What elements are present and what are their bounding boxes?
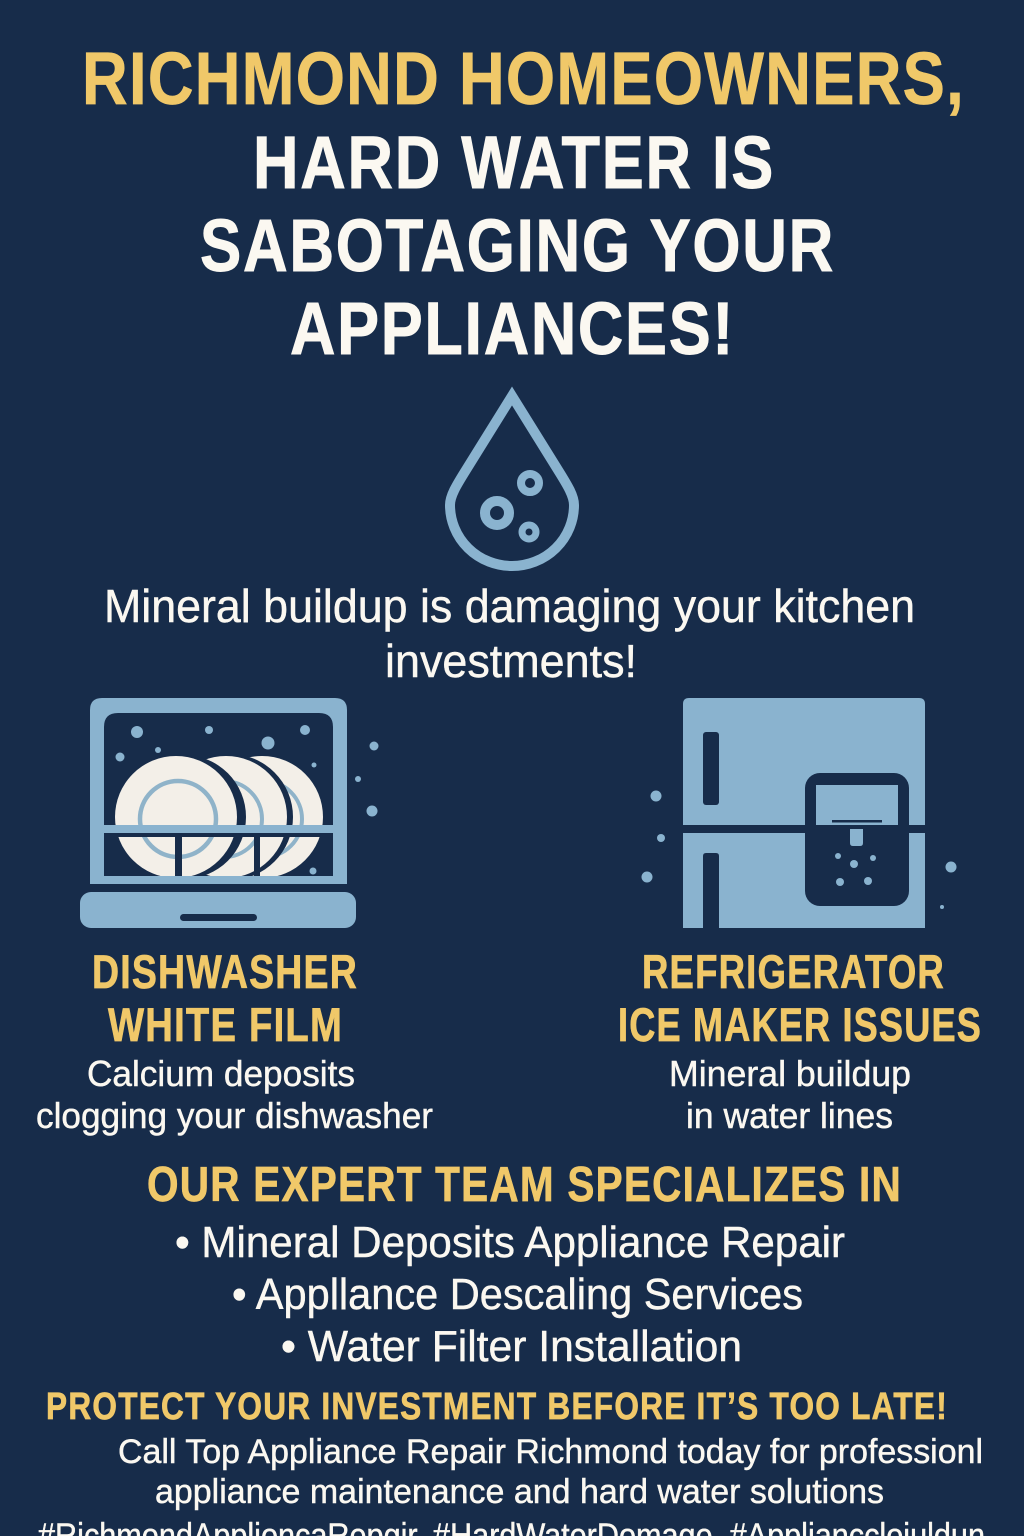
call to action: Call Top Appliance Repair Richmond today for professionl (118, 1433, 983, 1471)
subtitle (104, 580, 915, 687)
icon: dishwasher (80, 698, 378, 928)
text: dishwasher description: clogging your dishwasher (36, 1095, 433, 1136)
call to action: appliance maintenance and hard water solutions (155, 1473, 884, 1511)
title: APPLIANCES! (290, 287, 735, 370)
text: dishwasher description: Calcium deposits (87, 1053, 355, 1094)
icon: water drop with minerals (450, 396, 574, 566)
title: HARD WATER IS (253, 121, 775, 204)
title: SABOTAGING YOUR (200, 204, 835, 287)
text: refrigerator description (669, 1053, 911, 1136)
heading: dishwasher white film: DISHWASHER (92, 945, 358, 998)
text: dishwasher description (36, 1053, 433, 1136)
heading: refrigerator ice maker issues: REFRIGERATOR (642, 945, 945, 998)
heading: refrigerator ice maker issues (618, 945, 982, 1051)
text: refrigerator description: in water lines (686, 1095, 893, 1136)
call to action (118, 1433, 983, 1511)
heading: dishwasher white film: WHITE FILM (108, 998, 343, 1051)
text: refrigerator description: Mineral buildup (669, 1053, 911, 1094)
list: services: • Water Filter Installation (281, 1322, 742, 1371)
heading: dishwasher white film (92, 945, 358, 1051)
subtitle: investments! (385, 635, 637, 687)
list: services: • Mineral Deposits Appliance Repair (175, 1218, 845, 1267)
title (82, 37, 965, 370)
subtitle: Mineral buildup is damaging your kitchen (104, 580, 915, 632)
list: services: • Appllance Descaling Services (232, 1270, 803, 1319)
icon: refrigerator with ice maker (642, 698, 956, 928)
list: services (175, 1218, 845, 1371)
